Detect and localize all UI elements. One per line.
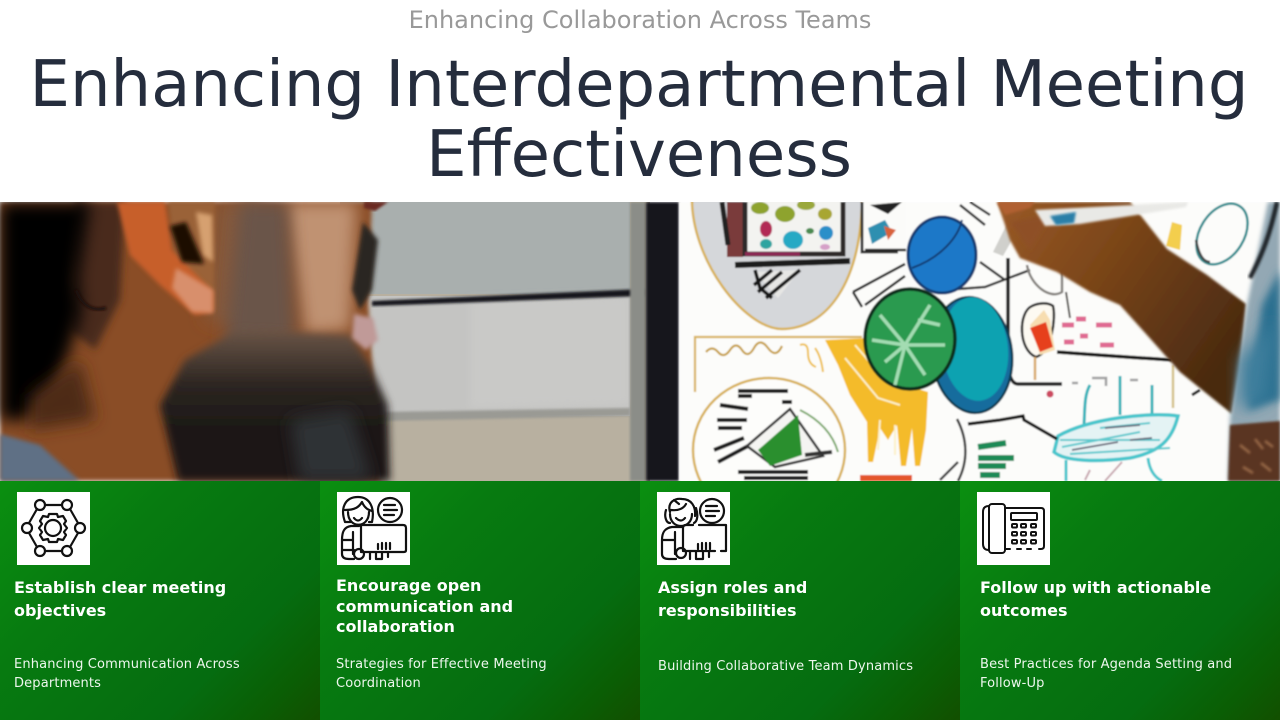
card heading: Encourage open [336,576,481,595]
card description [14,657,240,691]
card heading [980,578,1211,620]
card description: Enhancing Communication Across [14,657,240,672]
card heading: collaboration [336,617,455,636]
card heading: communication and [336,596,513,616]
card heading: Follow up with actionable [980,578,1211,597]
panel: assign roles and responsibilities [640,481,960,720]
left wall [340,202,679,481]
card description: Departments [14,676,101,691]
card heading: Assign roles and [658,578,807,597]
man's shirt at right edge [1228,202,1280,481]
card description [336,657,547,691]
icon: agent with headset at computer [657,492,730,565]
eyebrow subtitle: Enhancing Collaboration Across Teams [409,6,871,34]
card description: Best Practices for Agenda Setting and [980,657,1232,672]
main title: Effectiveness [426,118,852,192]
icon: woman at computer with speech bubble [337,492,410,565]
card heading: Establish clear meeting [14,578,226,597]
card heading [336,576,513,636]
card heading [14,578,226,620]
panel: follow up with actionable outcomes [960,481,1280,720]
card heading [658,578,807,620]
card description [980,657,1232,691]
main title: Enhancing Interdepartmental Meeting [30,48,1248,122]
main title [30,48,1248,192]
icon: gear in hexagon network [17,492,90,565]
card description: Building Collaborative Team Dynamics [658,659,913,674]
card description: Strategies for Effective Meeting [336,657,547,672]
panel: establish clear meeting objectives [0,481,320,720]
person's arm and hand holding a marker [997,202,1246,414]
panel: encourage open communication [320,481,640,720]
photo: man with beard viewing a colourful whiteboard [0,202,1280,481]
man: skin, hair, ear and beard [0,202,390,481]
card heading: outcomes [980,601,1068,620]
card heading: responsibilities [658,601,797,620]
whiteboard with drawing [679,194,1280,522]
card description: Coordination [336,676,421,691]
icon: desk telephone [977,492,1050,565]
card heading: objectives [14,601,106,620]
card description: Follow-Up [980,676,1045,691]
